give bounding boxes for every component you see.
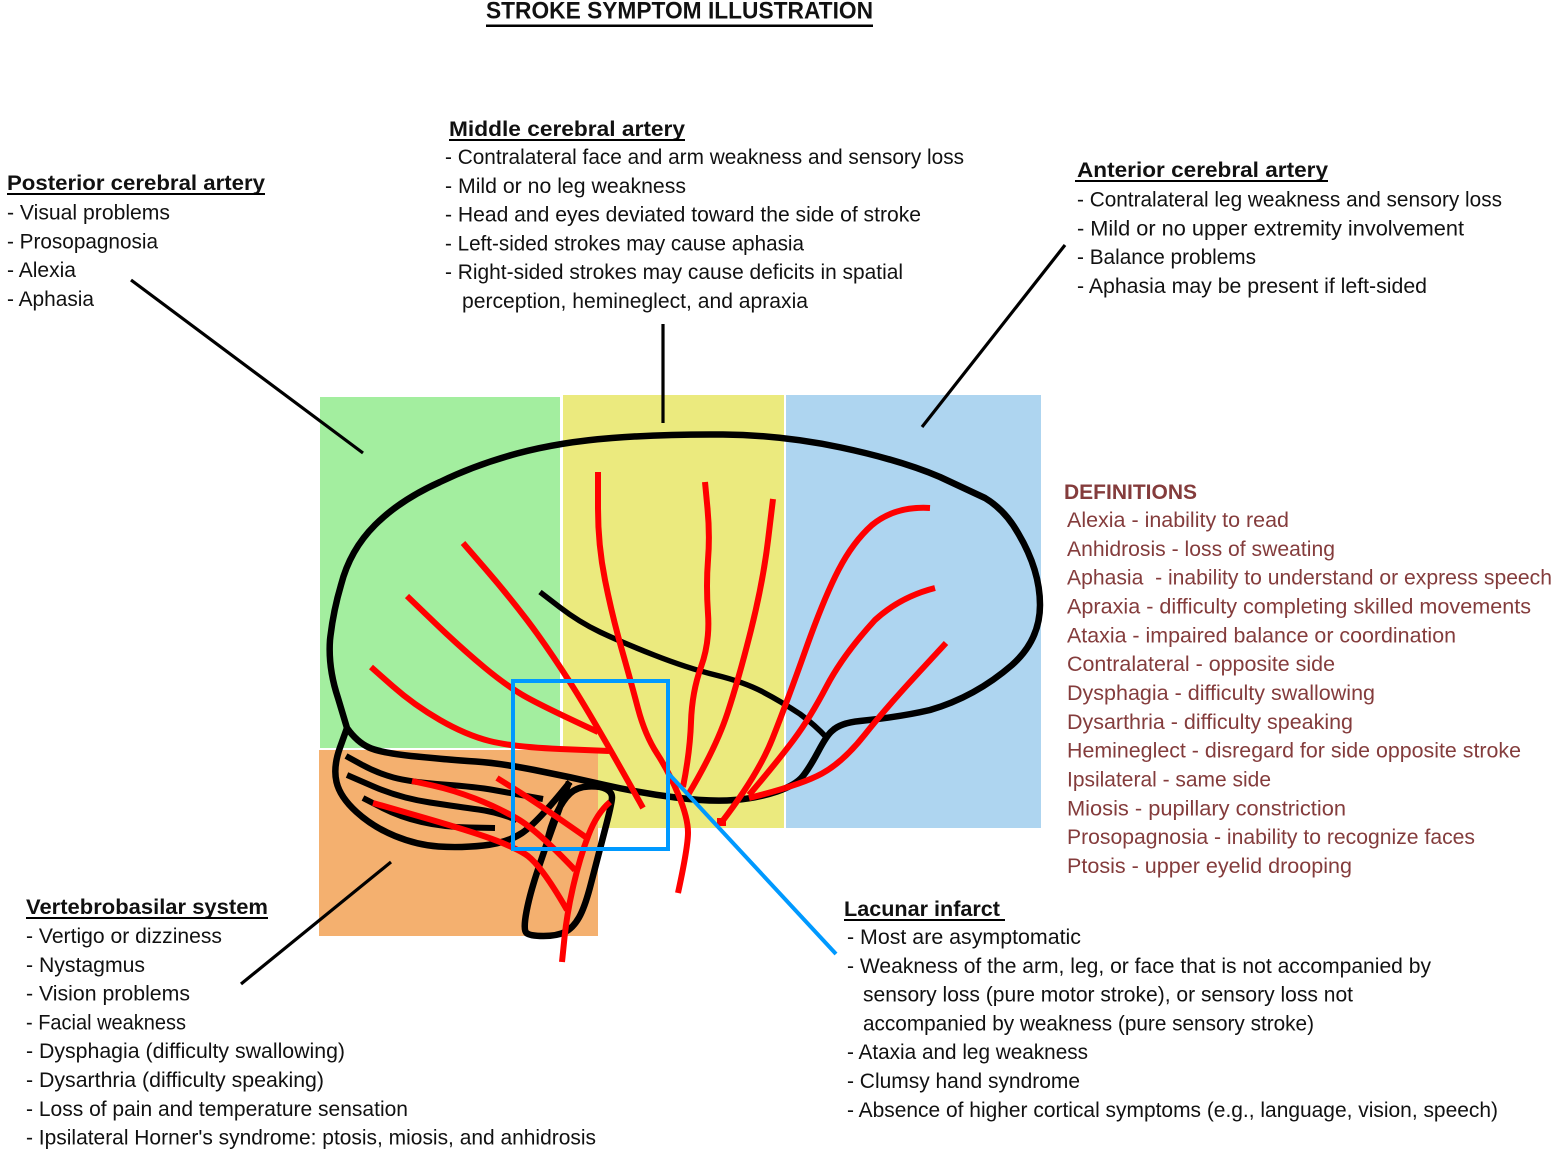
panel: vertebrobasilar system text: - Vertigo or dizziness [26,925,222,948]
arrow: anterior connector [922,245,1065,427]
panel: definitions: Alexia - inability to read [1067,509,1289,532]
panel: lacunar infarct text: - Weakness of the arm, leg, or face that is not accompanied by [847,955,1431,978]
panel: definitions: Aphasia - inability to understand or express speech [1067,567,1551,590]
panel: lacunar infarct text: - Absence of higher cortical symptoms (e.g., language, vision, speech) [847,1099,1498,1122]
panel: definitions: Ptosis - upper eyelid drooping [1067,855,1352,878]
panel: definitions: Contralateral - opposite side [1067,653,1335,676]
red artery end blob [717,818,726,826]
panel: posterior cerebral artery text: Posterior cerebral artery [7,171,265,195]
panel: anterior cerebral artery text: - Mild or no upper extremity involvement [1077,217,1464,240]
panel: definitions: Prosopagnosia - inability to recognize faces [1067,826,1475,849]
lacunar infarct box and pointer [513,681,836,954]
brainstem outline [525,782,612,936]
panel: middle cerebral artery text: Middle cerebral artery [449,117,685,141]
panel: middle cerebral artery text: - Right-sided strokes may cause deficits in spatial [445,261,903,284]
lateral sulcus [540,592,827,738]
panel: middle cerebral artery text: perception, hemineglect, and apraxia [462,290,808,313]
panel: definitions: Miosis - pupillary constriction [1067,797,1346,820]
panel: vertebrobasilar territory (orange) [319,750,598,936]
panel: definitions: Ipsilateral - same side [1067,768,1271,792]
panel: definitions: Hemineglect - disregard for side opposite stroke [1067,740,1521,763]
cerebrum outline [330,434,1040,801]
panel: lacunar infarct text: - Most are asymptomatic [847,926,1081,949]
panel: anterior cerebral artery text [1075,158,1502,298]
cerebellum outline [335,728,570,847]
panel: vertebrobasilar system text: - Vision problems [26,983,190,1006]
panel: middle cerebral artery text [445,117,964,313]
panel: definitions [1064,480,1551,878]
arrow: posterior connector [131,280,363,453]
panel: vertebrobasilar system text: - Dysphagia (difficulty swallowing) [26,1040,345,1063]
panel: definitions: Apraxia - difficulty completing skilled movements [1067,596,1531,618]
panel: definitions: Dysarthria - difficulty speaking [1067,711,1353,734]
panel: vertebrobasilar system text: - Nystagmus [26,954,145,977]
panel: posterior cerebral artery text: - Alexia [7,259,76,282]
panel: definitions: Dysphagia - difficulty swallowing [1067,682,1375,705]
panel: middle cerebral artery text: - Contralateral face and arm weakness and sensory loss [445,146,964,169]
panel: definitions: Anhidrosis - loss of sweating [1067,538,1335,561]
brain outline illustration [330,434,1040,936]
panel: lacunar infarct text: Lacunar infarct [844,897,1000,921]
arrow: vertebrobasilar connector [241,862,391,984]
panel: posterior territory (green) [320,397,560,748]
cerebellar folia [346,756,543,828]
panel: vertebrobasilar system text: - Ipsilateral Horner's syndrome: ptosis, miosis, and anhidrosis [26,1127,596,1150]
panel: anterior cerebral artery text: Anterior cerebral artery [1077,158,1328,182]
panel: posterior cerebral artery text [7,171,265,311]
panel: lacunar infarct text: - Ataxia and leg weakness [847,1041,1088,1064]
panel: middle cerebral artery text: - Head and eyes deviated toward the side of stroke [445,204,921,227]
panel: vertebrobasilar system text [26,895,596,1150]
panel: middle cerebral artery text: - Mild or no leg weakness [445,175,686,198]
panel: lacunar infarct text: - Clumsy hand syndrome [847,1070,1080,1093]
arrow: middle connector [661,324,665,423]
panel: lacunar infarct text: accompanied by weakness (pure sensory stroke) [863,1012,1314,1035]
panel: vertebrobasilar system text: - Dysarthria (difficulty speaking) [26,1069,324,1092]
panel: vertebrobasilar system text: - Loss of pain and temperature sensation [26,1098,408,1121]
panel: middle territory (yellow) [563,395,784,828]
panel: lacunar infarct text [844,897,1498,1122]
panel: middle cerebral artery text: - Left-sided strokes may cause aphasia [445,232,804,255]
panel: vertebrobasilar system text: Vertebrobasilar system [26,895,268,919]
panel: posterior cerebral artery text: - Prosopagnosia [7,230,158,253]
panel: anterior cerebral artery text: - Contralateral leg weakness and sensory loss [1077,189,1502,212]
panel: vertebrobasilar system text: - Facial weakness [26,1011,186,1034]
panel: lacunar infarct text: sensory loss (pure motor stroke), or sensory loss not [863,984,1353,1007]
panel: anterior cerebral artery text: - Aphasia may be present if left-sided [1077,275,1427,298]
panel: definitions: Ataxia - impaired balance or coordination [1067,624,1456,647]
panel: anterior cerebral artery text: - Balance problems [1077,246,1256,269]
red arteries [371,472,946,962]
panel: definitions: DEFINITIONS [1064,480,1197,504]
panel: posterior cerebral artery text: - Visual problems [7,202,170,225]
panel: posterior cerebral artery text: - Aphasia [7,288,94,311]
panel: anterior territory (blue) [786,395,1041,828]
